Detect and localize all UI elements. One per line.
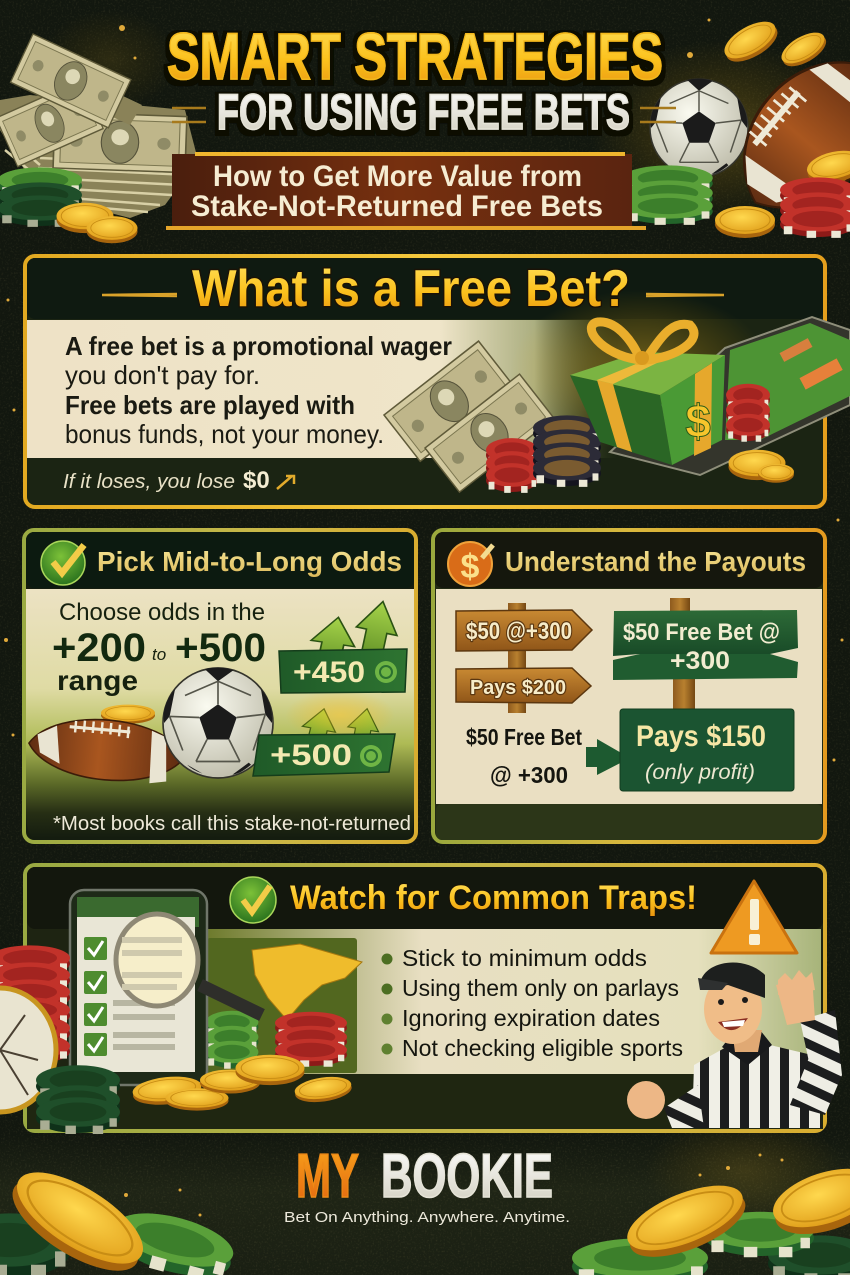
icon: coins	[728, 450, 794, 483]
icon: phone with checklist	[70, 890, 207, 1085]
signpost: green $50 free bet: $50 Free Bet @	[623, 619, 780, 646]
icon: magnifying glass	[116, 914, 262, 1015]
payout box: (only profit)	[645, 761, 755, 784]
icon: football	[26, 705, 188, 787]
note: if it loses	[63, 467, 294, 494]
header illustration: chip stacks and coins, right	[623, 14, 850, 238]
subtitle banner	[166, 152, 646, 230]
icon: dollar badge: $	[461, 548, 480, 586]
signpost: wooden $50 at +300 and pays $200	[456, 603, 592, 713]
odds range text	[52, 599, 266, 696]
payout box: Pays $150	[636, 720, 766, 753]
heading: pick mid-to-long odds: Pick Mid-to-Long Odds	[97, 546, 402, 577]
text: $50 free bet at +300	[466, 724, 582, 788]
header illustration: cash stack	[0, 34, 198, 218]
subtitle banner: Stake-Not-Returned Free Bets	[191, 190, 603, 223]
header illustration: green chips and coins, left	[0, 167, 138, 243]
footer coins and chips, left	[0, 1155, 239, 1275]
footer logo: MY	[296, 1142, 359, 1211]
panel: watch for common traps	[25, 865, 842, 1131]
traps list: Stick to minimum odds	[402, 945, 647, 971]
odds range text: range	[57, 665, 138, 696]
icon: coins	[131, 1055, 353, 1111]
icon: chip stacks center	[206, 1011, 347, 1069]
odds range text: to	[152, 645, 166, 664]
signpost: green $50 free bet	[613, 598, 798, 711]
icon: gift box: $	[685, 395, 711, 447]
icon: soccer ball	[163, 668, 273, 778]
definition text: A free bet is a promotional wager	[65, 331, 452, 361]
heading: what is a free bet: What is a Free Bet?	[192, 260, 630, 318]
footer logo: BOOKIE	[381, 1142, 553, 1211]
icon: green arrows	[285, 597, 403, 755]
header illustration: soccer ball	[650, 79, 748, 177]
odds range text: Choose odds in the	[59, 599, 265, 626]
odds range text: +500	[175, 626, 266, 670]
icon: clock	[0, 988, 56, 1112]
arrow: to payout box	[586, 739, 630, 775]
traps list: Using them only on parlays	[402, 975, 679, 1001]
icon: warning triangle	[711, 881, 797, 953]
icon: flag on green field	[207, 938, 362, 1073]
definition text: Free bets are played with	[65, 390, 355, 420]
subtitle banner: How to Get More Value from	[213, 160, 582, 193]
payout box	[620, 709, 794, 791]
note: if it loses: $0	[243, 467, 270, 494]
icon: gift box	[570, 322, 725, 465]
traps list	[382, 945, 683, 1061]
panel: what is a free bet	[25, 256, 850, 507]
signpost: green $50 free bet: +300	[670, 647, 730, 675]
badge: +450: +450	[293, 656, 365, 689]
odds range text: +200	[52, 626, 146, 670]
note: if it loses: If it loses, you lose	[63, 471, 235, 493]
footnote: *Most books call this stake-not-returned	[53, 813, 411, 835]
traps list: Not checking eligible sports	[402, 1035, 683, 1061]
definition text: you don't pay for.	[65, 360, 260, 390]
header illustration: american football	[712, 31, 850, 239]
text: $50 free bet at +300: @ +300	[490, 762, 568, 788]
footer logo	[296, 1142, 553, 1211]
title line 2 with side rules: FOR USING FREE BETS	[217, 84, 630, 140]
icon: dollar bills	[384, 341, 554, 492]
icon: dollar badge	[448, 542, 493, 586]
icon: chip stacks	[486, 415, 601, 493]
icon: green check	[41, 541, 85, 585]
heading: watch for common traps: Watch for Common Traps!	[290, 879, 697, 917]
text: $50 free bet at +300: $50 Free Bet	[466, 724, 582, 750]
icon: green check	[230, 877, 276, 923]
icon: red chip stack, left	[0, 945, 70, 1065]
signpost: wooden $50 at +300 and pays $200: $50 @+300	[466, 618, 572, 645]
badge: +450	[279, 649, 407, 693]
signpost: wooden $50 at +300 and pays $200: Pays $200	[470, 677, 566, 699]
icon: referee	[627, 963, 842, 1128]
footer coins and chips, right	[572, 1157, 850, 1275]
heading: understand the payouts: Understand the Payouts	[505, 546, 806, 577]
icon: dark chips	[36, 1065, 120, 1134]
traps list: Ignoring expiration dates	[402, 1005, 660, 1031]
definition text	[65, 331, 452, 449]
definition text: bonus funds, not your money.	[65, 419, 384, 449]
footer tagline: Bet On Anything. Anywhere. Anytime.	[284, 1209, 570, 1226]
title line 1: SMART STRATEGIES	[167, 19, 663, 93]
panel: understand the payouts	[433, 530, 825, 842]
icon: phone betting app	[610, 317, 850, 475]
badge: +500: +500	[270, 739, 352, 772]
panel: pick mid-to-long odds	[24, 530, 416, 842]
badge: +500	[253, 734, 395, 776]
